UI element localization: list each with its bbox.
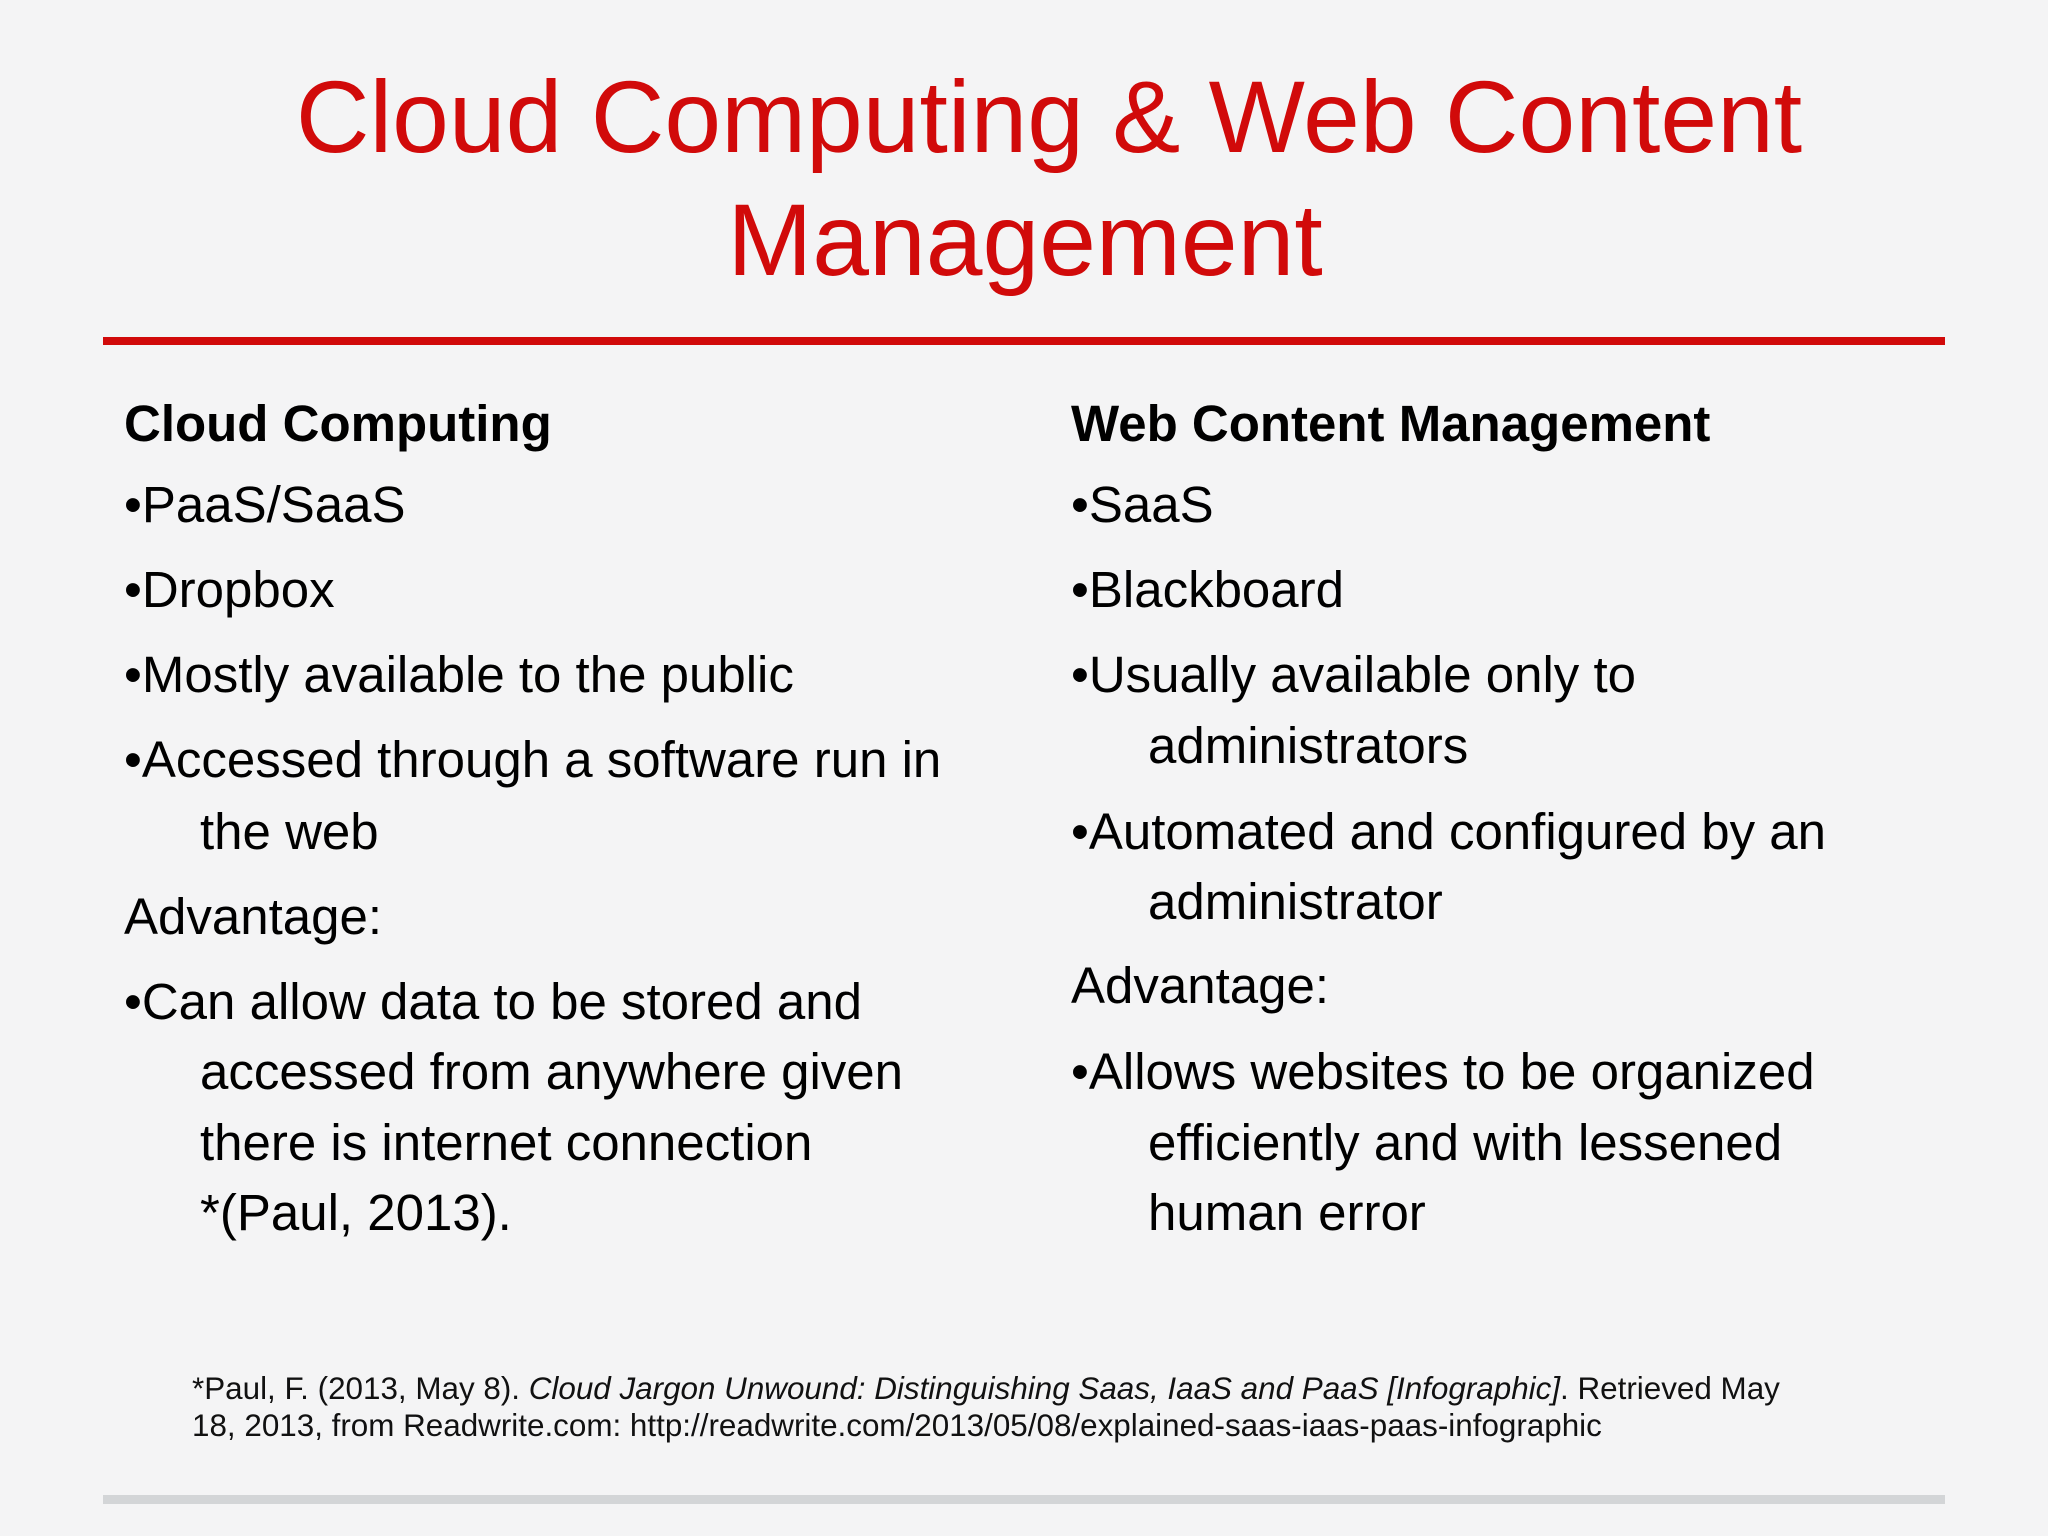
bullet list: web content management: •Allows websites to be organized	[1071, 1043, 1815, 1100]
heading: cloud computing: Cloud Computing	[124, 395, 552, 452]
bullet list: web content management: •SaaS	[1071, 476, 1214, 533]
bullet list: web content management	[1071, 476, 1826, 1241]
bullet list: cloud computing: •Dropbox	[124, 561, 335, 618]
bullet list: web content management: •Usually available only to	[1071, 646, 1636, 703]
bullet list: cloud computing: the web	[200, 803, 379, 860]
bullet list: web content management: administrators	[1148, 717, 1468, 774]
title underline	[103, 337, 1945, 345]
bullet list: web content management: administrator	[1148, 873, 1443, 930]
title: Management	[727, 183, 1323, 297]
bullet list: cloud computing: *(Paul, 2013).	[200, 1184, 512, 1241]
bullet list: web content management: Advantage:	[1071, 957, 1329, 1014]
bullet list: web content management: •Automated and configured by an	[1071, 803, 1826, 860]
heading: web content management: Web Content Management	[1071, 395, 1710, 452]
footnote citation: *Paul, F. (2013, May 8). Cloud Jargon Unwound: Distinguishing Saas, IaaS and PaaS [Infographic]. Retrieved May	[192, 1371, 1780, 1406]
bullet list: cloud computing: •PaaS/SaaS	[124, 476, 406, 533]
bullet list: cloud computing: •Accessed through a software run in	[124, 731, 941, 788]
footnote citation	[192, 1371, 1780, 1443]
title	[296, 60, 1802, 297]
panel: web content management	[1071, 395, 1826, 1241]
bullet list: cloud computing: accessed from anywhere given	[200, 1043, 903, 1100]
bullet list: web content management: efficiently and with lessened	[1148, 1114, 1782, 1171]
bullet list: cloud computing: Advantage:	[124, 888, 382, 945]
bullet list: cloud computing: there is internet connection	[200, 1114, 812, 1171]
bullet list: cloud computing: •Can allow data to be stored and	[124, 973, 862, 1030]
footnote citation: 18, 2013, from Readwrite.com: http://readwrite.com/2013/05/08/explained-saas-iaas-paas-infographic	[192, 1408, 1602, 1443]
bullet list: cloud computing	[124, 476, 941, 1241]
bullet list: web content management: human error	[1148, 1184, 1426, 1241]
title: Cloud Computing & Web Content	[296, 60, 1802, 174]
bullet list: web content management: •Blackboard	[1071, 561, 1344, 618]
bullet list: cloud computing: •Mostly available to the public	[124, 646, 794, 703]
panel: cloud computing	[124, 395, 941, 1241]
